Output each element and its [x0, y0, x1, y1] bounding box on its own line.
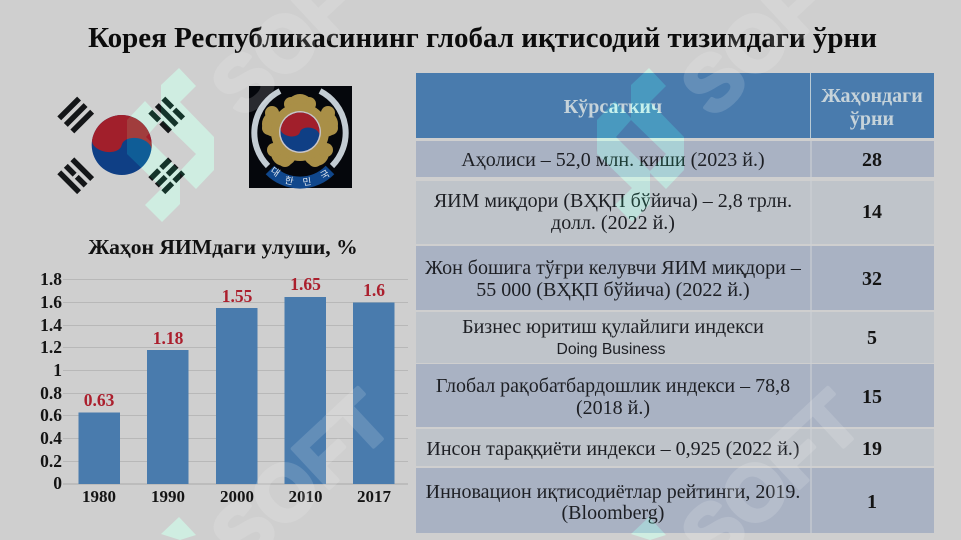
icon: national emblem of Korea: 한 [283, 172, 295, 188]
row: ease of doing business [416, 312, 934, 363]
watermark: SOFT text [195, 0, 877, 540]
row: population [416, 141, 934, 177]
icon: national emblem of Korea: 대 [268, 163, 283, 179]
icon: national emblem of Korea: 민 [302, 173, 312, 189]
y axis labels: 1.2 [40, 337, 62, 357]
y axis labels: 0 [53, 473, 62, 493]
row: global competitiveness: (2018 й.) [576, 397, 650, 419]
data values [84, 274, 385, 410]
y axis labels: 1.4 [40, 315, 62, 335]
row: GDP per capita: Жон бошига тўғри келувчи ЯИМ миқдори – [425, 257, 802, 279]
y axis labels: 1 [53, 360, 62, 380]
row: GDP per capita: 32 [862, 268, 882, 290]
y axis labels: 1.8 [40, 269, 62, 289]
row: human development: 19 [862, 438, 882, 460]
y axis labels: 0.2 [40, 451, 62, 471]
row: GDP per capita: 55 000 (ВҲҚП бўйича) (2022 й.) [476, 279, 750, 301]
y axis labels: 1.6 [40, 292, 62, 312]
icon: South Korean flag [57, 97, 185, 194]
y axis labels: 0.4 [40, 428, 62, 448]
bars [78, 297, 394, 484]
category labels: 1980 [82, 487, 116, 506]
icon: national emblem of Korea: 국 [317, 166, 332, 182]
chart heading: Жаҳон ЯИМдаги улуши, % [88, 235, 358, 259]
data values: 1.55 [222, 286, 253, 306]
row: GDP [416, 181, 934, 244]
category labels: 2000 [220, 487, 254, 506]
row: ease of doing business: Бизнес юритиш қулайлиги индекси [462, 316, 764, 338]
row: GDP: 14 [862, 201, 882, 223]
title: Корея Республикасининг глобал иқтисодий тизимдаги ўрни [88, 22, 877, 54]
data values: 1.65 [290, 274, 321, 294]
row: human development: Инсон тараққиёти индекси – 0,925 (2022 й.) [426, 438, 800, 460]
y axis labels [40, 269, 62, 493]
data values: 1.18 [153, 328, 184, 348]
y axis labels: 0.8 [40, 383, 62, 403]
row: innovation ranking: 1 [867, 491, 877, 513]
table header: Кўрсаткич [564, 96, 662, 118]
category labels: 2017 [357, 487, 392, 506]
row: innovation ranking [416, 468, 934, 533]
row: ease of doing business: Doing Business [556, 341, 666, 358]
row: global competitiveness: Глобал рақобатбардошлик индекси – 78,8 [436, 375, 790, 397]
category labels: 2010 [288, 487, 322, 506]
row: GDP per capita [416, 246, 934, 310]
row: human development [416, 429, 934, 466]
row: GDP: ЯИМ миқдори (ВҲҚП бўйича) – 2,8 трлн. [434, 190, 792, 212]
panel: indicators table [416, 73, 934, 533]
table header: ўрни [850, 108, 894, 130]
row: innovation ranking: (Bloomberg) [562, 502, 664, 524]
y axis labels: 0.6 [40, 405, 62, 425]
row: population: Аҳолиси – 52,0 млн. киши (2023 й.) [461, 149, 765, 171]
bar chart: share of world GDP [40, 269, 408, 506]
row: innovation ranking: Инновацион иқтисодиётлар рейтинги, 2019. [426, 481, 800, 503]
row: global competitiveness [416, 364, 934, 427]
icon: national emblem of Korea [249, 86, 352, 189]
data values: 1.6 [363, 280, 385, 300]
row: ease of doing business: 5 [867, 327, 877, 349]
category labels: 1990 [151, 487, 185, 506]
table header: Жаҳондаги [821, 85, 923, 107]
category labels [82, 487, 392, 506]
data values: 0.63 [84, 390, 115, 410]
row: GDP: долл. (2022 й.) [551, 212, 675, 234]
row: population: 28 [862, 149, 882, 171]
watermark: mint logo marks [127, 68, 684, 540]
table header [416, 73, 934, 138]
row: global competitiveness: 15 [862, 386, 882, 408]
